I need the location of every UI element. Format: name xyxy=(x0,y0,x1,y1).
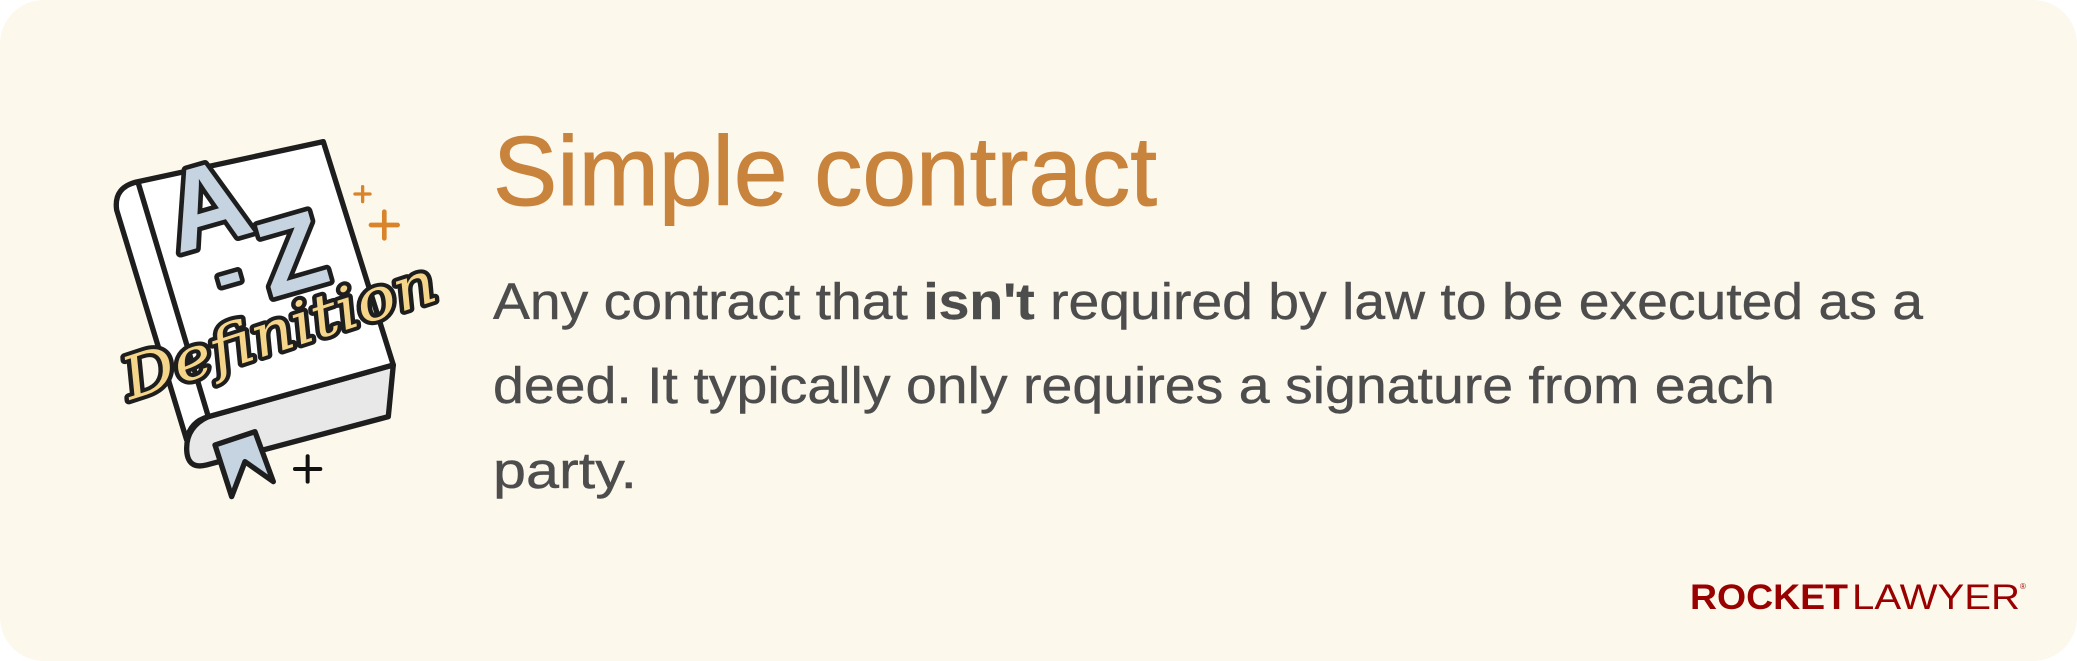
logo: Rocket Lawyer: ® xyxy=(2020,582,2026,591)
letters A-Z: A xyxy=(150,133,263,278)
body text xyxy=(493,273,1924,499)
body text: party. xyxy=(493,442,637,499)
title: Simple contract xyxy=(493,116,1157,226)
body text: deed. It typically only requires a signature from each xyxy=(493,357,1775,414)
cover xyxy=(116,142,393,440)
Definition script: Definition xyxy=(112,248,444,414)
letters A-Z: - xyxy=(204,229,252,318)
letters A-Z: Z xyxy=(244,187,339,320)
page block xyxy=(187,365,393,466)
plus marks xyxy=(355,187,370,202)
logo: Rocket Lawyer: ROCKET xyxy=(1690,578,1848,617)
body text: Any contract that isn't required by law to be executed as a xyxy=(493,273,1924,330)
icon: definition book xyxy=(112,116,444,497)
logo: Rocket Lawyer xyxy=(1690,578,2026,617)
letters A-Z xyxy=(150,116,339,341)
bookmark xyxy=(215,432,273,497)
logo: Rocket Lawyer: LAWYER xyxy=(1852,578,2020,617)
